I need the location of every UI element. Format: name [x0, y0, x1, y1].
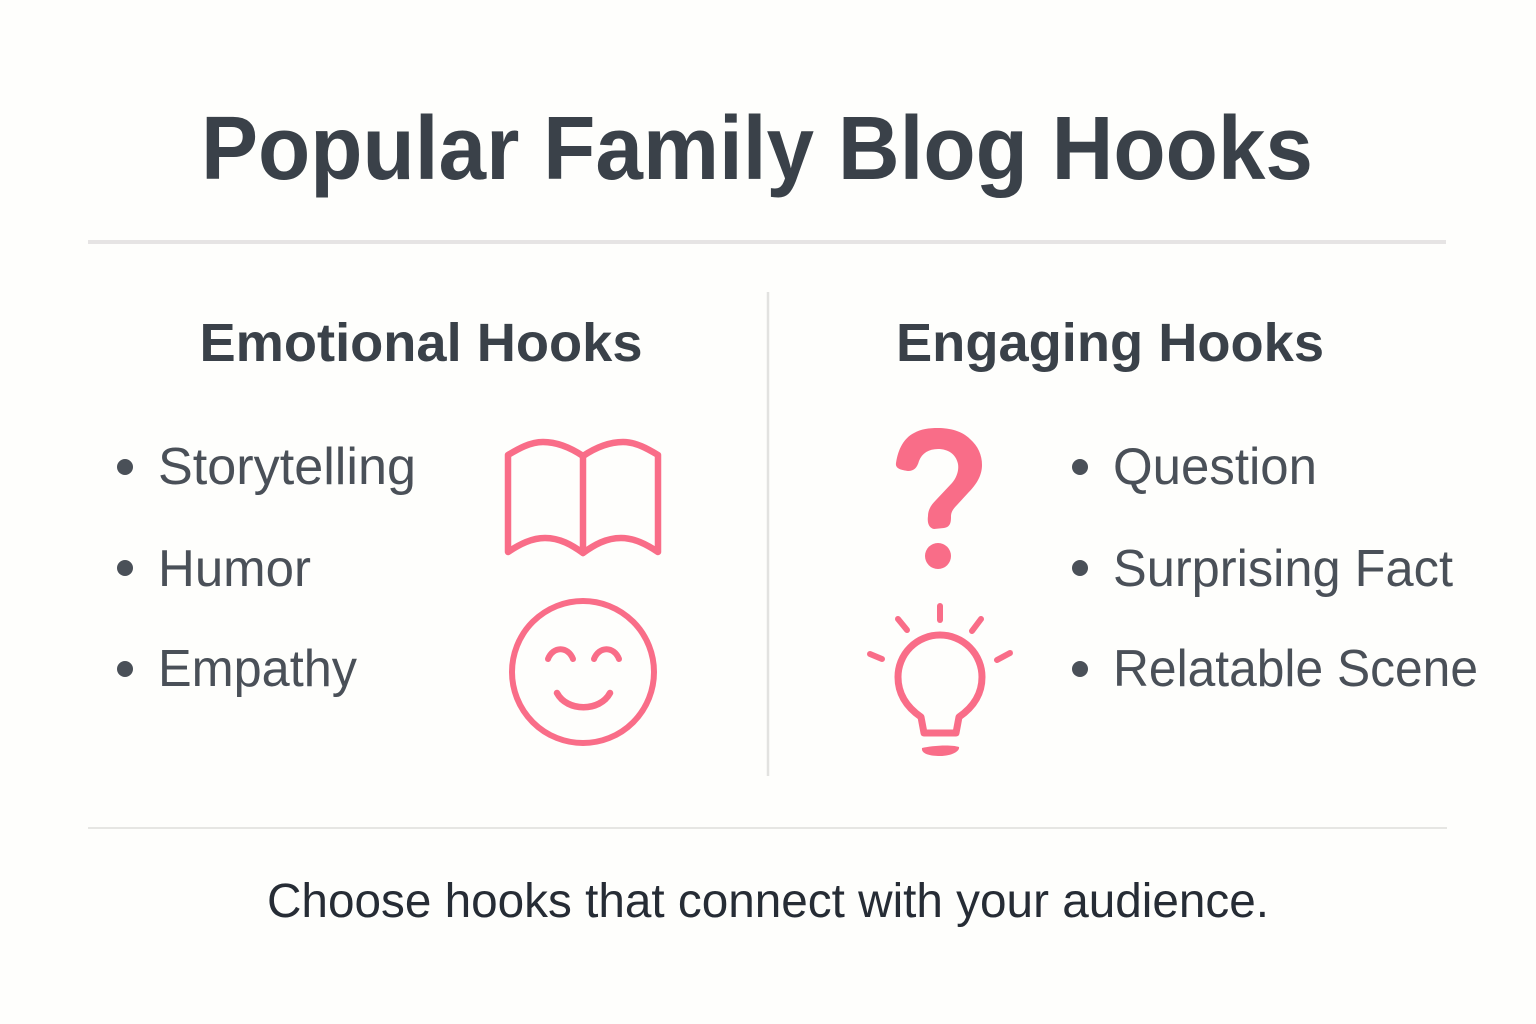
icon: smiling face [512, 601, 654, 743]
icon: question mark [896, 428, 982, 569]
panel: engaging hooks [870, 313, 1478, 756]
list: emotional hooks: Storytelling [158, 438, 416, 496]
heading: engaging hooks: Engaging Hooks [896, 313, 1324, 373]
footer text: Choose hooks that connect with your audience. [267, 875, 1269, 928]
list: emotional hooks: Humor [158, 540, 311, 598]
icon: light bulb [870, 606, 1010, 756]
list: emotional hooks: Empathy [158, 640, 357, 698]
icon: open book [508, 442, 658, 553]
list: emotional hooks [117, 438, 416, 698]
list: engaging hooks: Surprising Fact [1113, 540, 1454, 598]
heading: emotional hooks: Emotional Hooks [200, 313, 642, 373]
list: engaging hooks: Question [1113, 438, 1317, 496]
list: engaging hooks: Relatable Scene [1113, 640, 1478, 698]
list: engaging hooks [1072, 438, 1478, 698]
panel: emotional hooks [117, 313, 658, 743]
title: Popular Family Blog Hooks [201, 99, 1313, 199]
